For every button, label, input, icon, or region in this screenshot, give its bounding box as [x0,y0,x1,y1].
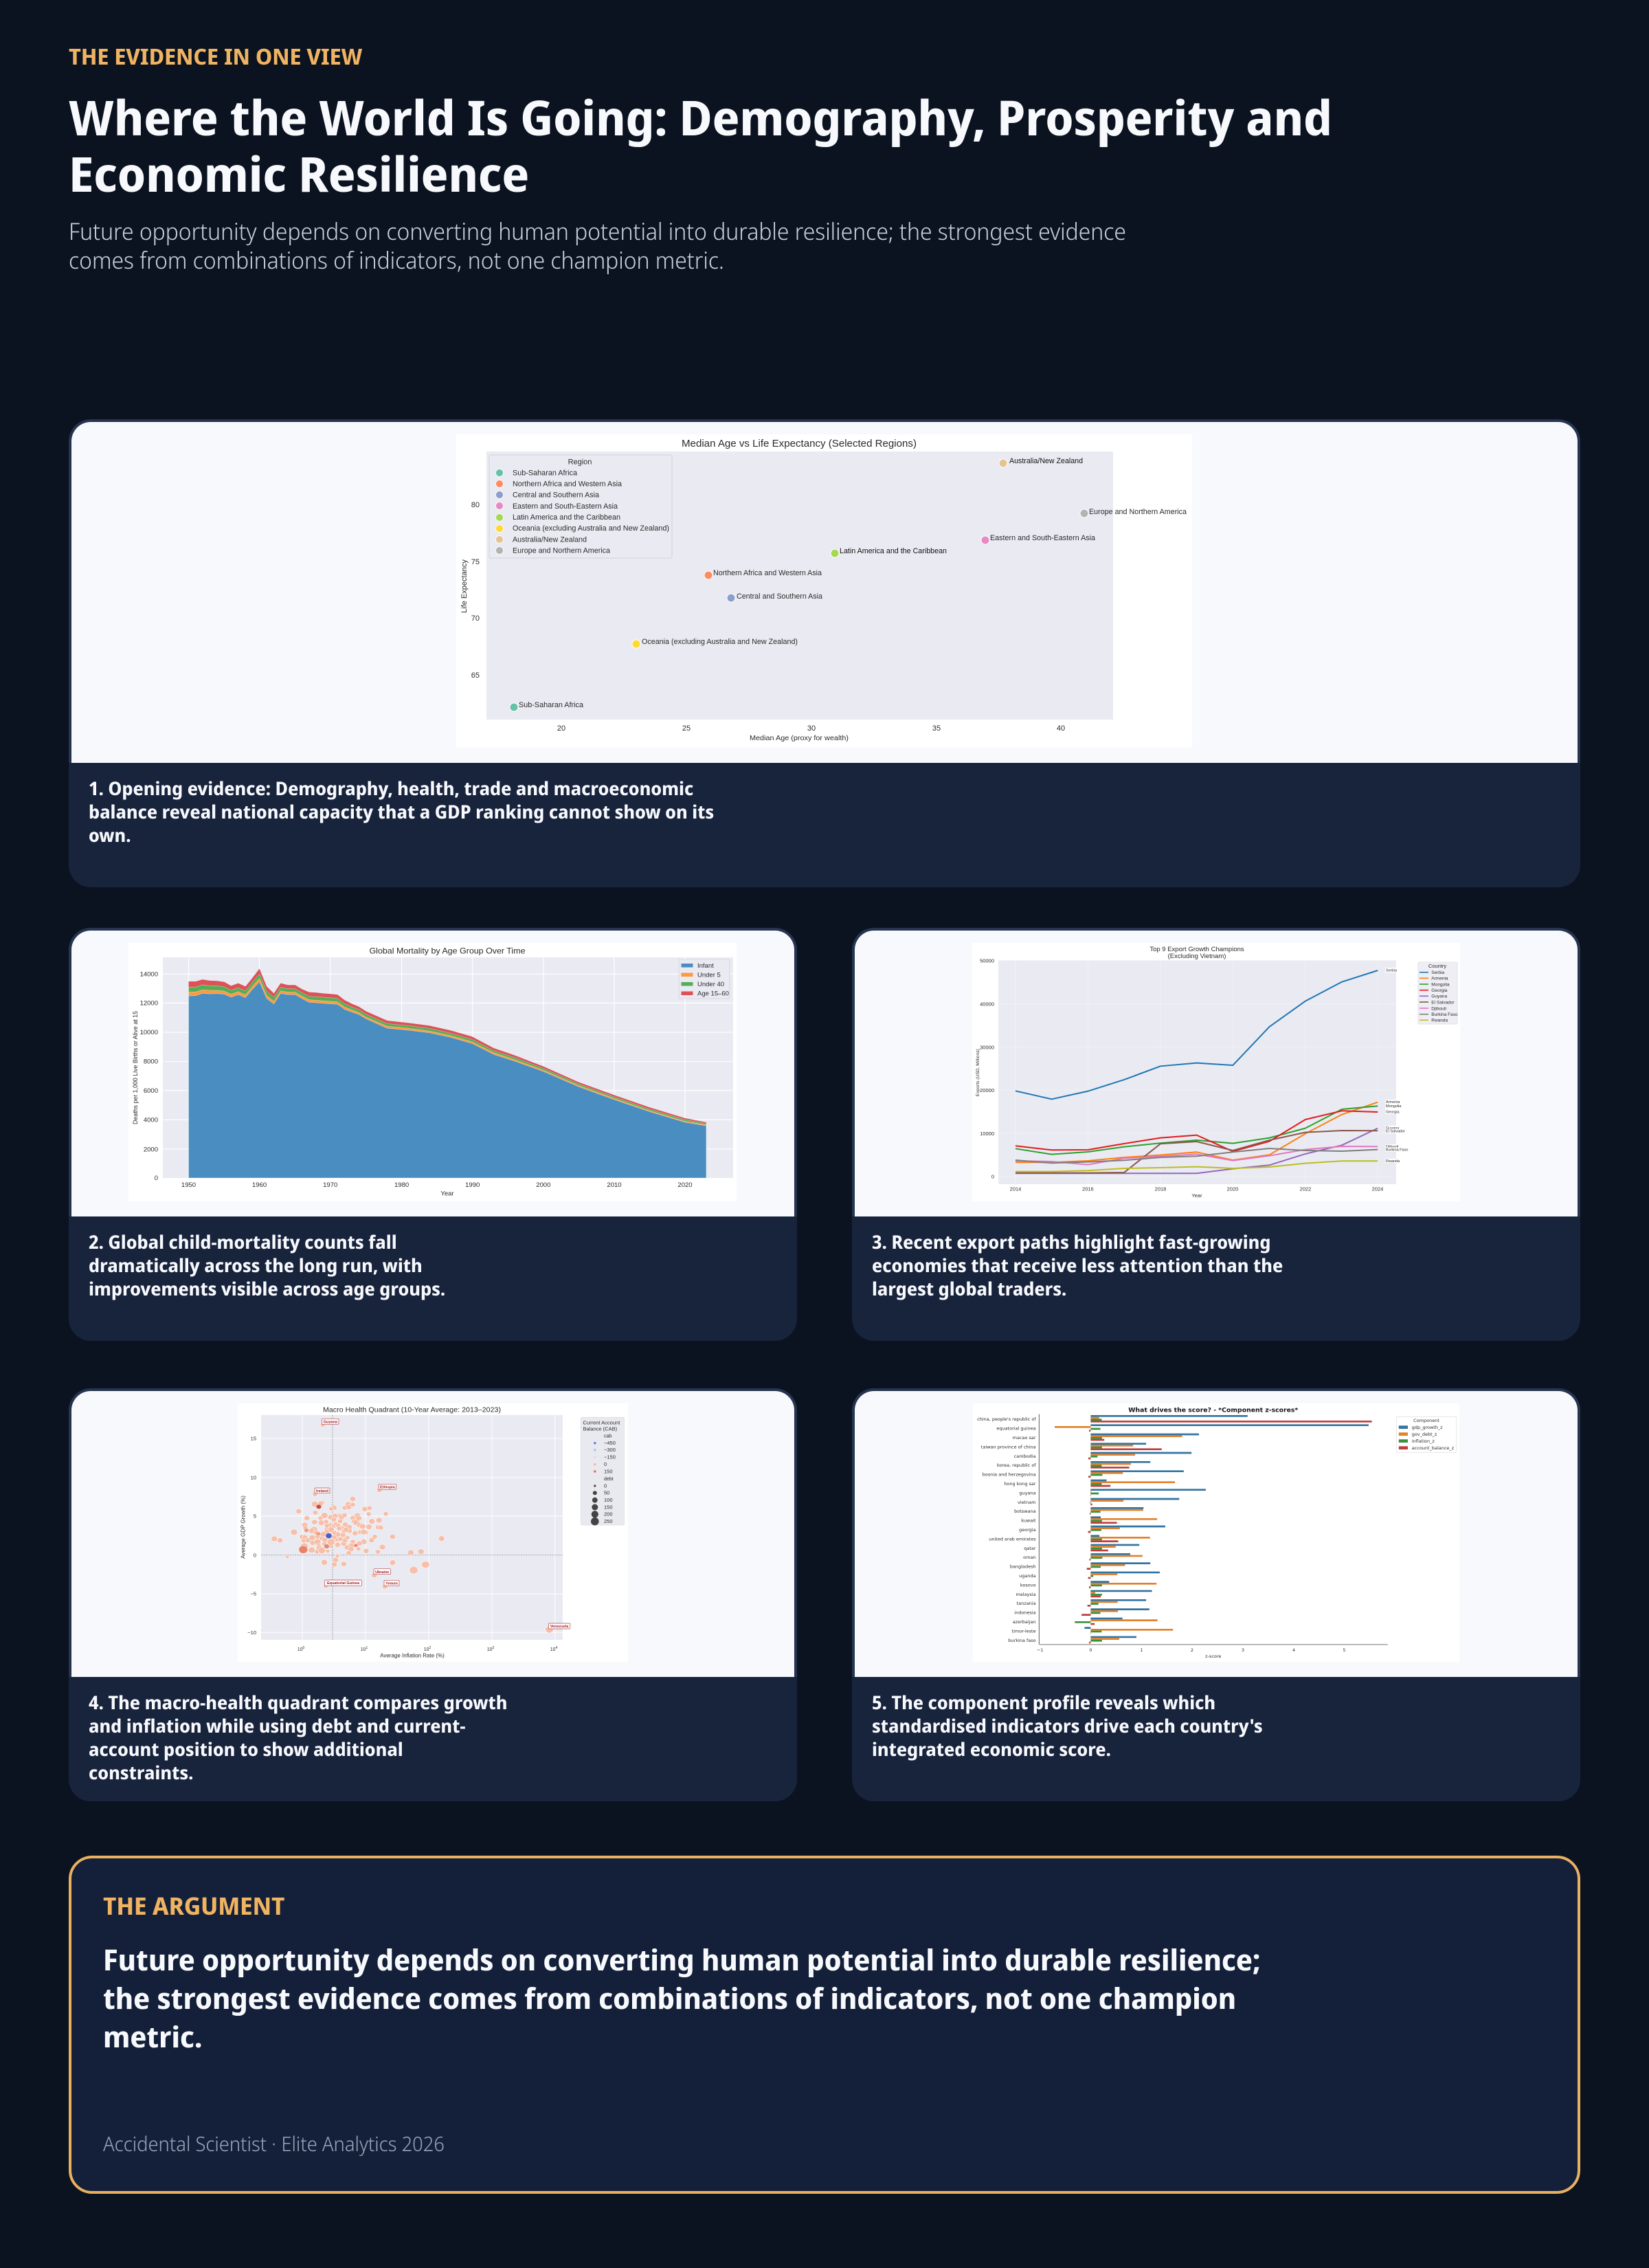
quadrant country labels: Ireland [316,1489,328,1493]
chart: component z-scores horizontal bars: china, people's republic of [977,1416,1036,1422]
end labels: Mongolia [1386,1104,1402,1109]
chart: median age vs life expectancy scatter: 65 [471,671,480,680]
legend: current account balance and debt [581,1417,624,1526]
chart: top 9 export growth champions line chart: 2022 [1300,1186,1311,1192]
subtitle [69,215,1126,276]
legend: current account balance and debt: 0 [604,1482,607,1489]
chart: macro health quadrant bubble plot: 10 [487,1647,493,1652]
chart: component z-scores horizontal bars: uganda [1019,1573,1036,1579]
quadrant country labels: Venezuela [550,1625,569,1629]
legend: country: Djibouti [1431,1006,1446,1011]
legend: current account balance and debt: 200 [604,1511,613,1517]
argument statement: the strongest evidence comes from combinations of indicators, not one champion [103,1979,1236,2018]
chart: top 9 export growth champions line chart: 10000 [980,1131,994,1137]
chart: global mortality stacked area: 4000 [144,1116,158,1124]
legend: country: Rwanda [1431,1019,1448,1023]
legend: component: gov_debt_z [1412,1432,1437,1437]
legend: age groups: Under 40 [697,981,724,988]
chart: component z-scores horizontal bars: cambodia [1014,1454,1036,1459]
caption 3: largest global traders. [872,1276,1066,1301]
chart: global mortality stacked area: 2010 [607,1181,622,1189]
subtitle: Future opportunity depends on converting human potential into durable resilience; the strongest evidence [69,215,1126,247]
chart: median age vs life expectancy scatter: Sub-Saharan Africa [519,701,584,709]
chart: global mortality stacked area: Year [440,1190,454,1197]
end labels: Djibouti [1386,1145,1398,1149]
title [69,85,1332,206]
chart: median age vs life expectancy scatter: Central and Southern Asia [737,592,823,601]
caption 4: account position to show additional [89,1736,403,1761]
legend: region [489,455,672,558]
chart: component z-scores horizontal bars: 2 [1191,1647,1193,1653]
chart: median age vs life expectancy scatter: 35 [932,724,941,733]
legend: age groups: Age 15–60 [697,990,729,998]
legend: region: Region [568,458,592,466]
legend: country: Georgia [1431,988,1448,993]
caption 5: integrated economic score. [872,1736,1111,1761]
chart: component z-scores horizontal bars: vietnam [1018,1500,1036,1505]
chart: median age vs life expectancy scatter: 20 [557,724,565,733]
caption 2: 2. Global child-mortality counts fall [89,1229,397,1254]
legend: age groups: Infant [697,962,714,970]
chart: component z-scores horizontal bars: 1 [1140,1647,1143,1653]
quadrant country labels: Ukraine [375,1570,389,1575]
chart: macro health quadrant bubble plot: 10 [550,1647,556,1652]
chart: global mortality stacked area [132,946,733,1197]
chart: component z-scores horizontal bars: equatorial guinea [996,1426,1036,1432]
chart: median age vs life expectancy scatter: Northern Africa and Western Asia [713,569,822,577]
legend: country: El Salvador [1431,1000,1455,1005]
chart: macro health quadrant bubble plot: −10 [247,1630,256,1636]
chart: component z-scores horizontal bars: bangladesh [1010,1564,1036,1570]
chart: component z-scores horizontal bars: taiwan province of china [981,1444,1036,1449]
legend: current account balance and debt: −150 [604,1454,616,1460]
caption 2: improvements visible across age groups. [89,1276,445,1301]
legend: region: Central and Southern Asia [513,491,600,499]
footer credit: Accidental Scientist · Elite Analytics 2026 [103,2131,445,2157]
quadrant country labels [315,1419,570,1629]
argument statement: metric. [103,2017,202,2056]
chart: global mortality stacked area: 2000 [536,1181,550,1189]
end labels [1385,968,1408,1164]
legend: component: Component [1413,1418,1439,1423]
legend: region: Europe and Northern America [513,547,611,555]
caption 4: and inflation while using debt and current- [89,1713,465,1738]
legend: country: Mongolia [1431,982,1450,987]
chart: median age vs life expectancy scatter: Oceania (excluding Australia and New Zealand) [642,638,798,646]
caption 2: dramatically across the long run, with [89,1252,423,1278]
argument eyebrow: THE ARGUMENT [103,1889,284,1922]
end labels: Rwanda [1386,1159,1400,1164]
image area 3 [852,928,1580,1216]
chart: top 9 export growth champions line chart: 2016 [1082,1186,1094,1192]
chart: macro health quadrant bubble plot: Average Inflation Rate (%) [380,1653,445,1659]
chart: component z-scores horizontal bars: oman [1023,1555,1036,1560]
image area 5 [852,1388,1580,1677]
caption 5: standardised indicators drive each country's [872,1713,1263,1738]
legend: country: Country [1428,963,1446,969]
chart: macro health quadrant bubble plot: 5 [254,1513,256,1520]
image area 1 [69,419,1580,763]
panel: card 4 macro health quadrant [69,1388,797,1801]
legend: region: Australia/New Zealand [513,536,587,544]
caption 3: 3. Recent export paths highlight fast-growing [872,1229,1270,1254]
chart: component z-scores horizontal bars: qatar [1024,1546,1036,1551]
chart: macro health quadrant bubble plot: Macro Health Quadrant (10-Year Average: 2013–2023) [323,1406,501,1414]
legend: component: inflation_z [1412,1438,1435,1444]
chart: top 9 export growth champions line chart: (Excluding Vietnam) [1168,953,1226,960]
legend: current account balance and debt: 0 [604,1461,607,1467]
chart: component z-scores horizontal bars: kosovo [1020,1582,1036,1588]
chart: component z-scores horizontal bars: hong kong sar [1004,1481,1036,1487]
caption 3 [872,1229,1283,1301]
chart: top 9 export growth champions line chart: 40000 [980,1001,994,1007]
chart: median age vs life expectancy scatter: Latin America and the Caribbean [840,547,947,555]
end labels: Burkina Faso [1386,1148,1408,1152]
legend: current account balance and debt: −300 [604,1447,616,1453]
image area 2 [69,928,797,1216]
chart: macro health quadrant bubble plot: −5 [250,1591,256,1597]
chart: top 9 export growth champions line chart: 2020 [1227,1186,1238,1192]
legend: current account balance and debt: debt [604,1477,614,1482]
legend: region: Northern Africa and Western Asia [513,480,622,488]
title: Where the World Is Going: Demography, Prosperity and [69,85,1332,150]
chart: macro health quadrant bubble plot: 10 [361,1647,366,1652]
caption 1: 1. Opening evidence: Demography, health, trade and macroeconomic [89,775,693,801]
end labels: Guyana [1386,1126,1400,1131]
chart: median age vs life expectancy scatter: Life Expectancy [460,559,469,613]
legend: component: gdp_growth_z [1412,1425,1443,1430]
legend: current account balance and debt: 50 [604,1490,609,1496]
end labels: Georgia [1386,1111,1400,1115]
chart: component z-scores horizontal bars: 3 [1242,1647,1244,1653]
chart: component z-scores horizontal bars: 4 [1292,1647,1295,1653]
legend: region: Sub-Saharan Africa [513,469,578,477]
chart: median age vs life expectancy scatter: 25 [682,724,691,733]
chart: global mortality stacked area: 2020 [677,1181,693,1189]
caption 4 [89,1689,507,1785]
chart: top 9 export growth champions line chart: 30000 [980,1044,994,1050]
caption 3: economies that receive less attention than the [872,1252,1283,1278]
legend: age groups [679,959,730,999]
chart: component z-scores horizontal bars: −1 [1037,1647,1044,1653]
chart: global mortality stacked area: 6000 [144,1087,158,1095]
chart: component z-scores horizontal bars: What drives the score? - *Component z-scores* [1128,1408,1299,1414]
chart: component z-scores horizontal bars: macao sar [1013,1435,1036,1441]
chart: component z-scores horizontal bars: z-score [1205,1654,1221,1659]
caption 1 [89,775,714,847]
chart: component z-scores horizontal bars: korea, republic of [997,1463,1036,1468]
chart: component z-scores horizontal bars: united arab emirates [989,1536,1036,1542]
chart: top 9 export growth champions line chart: 0 [991,1174,994,1180]
chart: median age vs life expectancy scatter: Europe and Northern America [1089,508,1187,516]
chart: median age vs life expectancy scatter: Eastern and South-Eastern Asia [990,534,1096,542]
chart: top 9 export growth champions line chart: 2014 [1010,1186,1021,1192]
panel: the argument [69,1856,1580,2194]
chart: median age vs life expectancy scatter: Median Age (proxy for wealth) [750,734,849,742]
caption 4: constraints. [89,1759,193,1785]
caption 1: balance reveal national capacity that a GDP ranking cannot show on its [89,799,714,824]
legend: region: Eastern and South-Eastern Asia [513,502,618,511]
end labels: Armenia [1386,1100,1400,1104]
chart: macro health quadrant bubble plot: 10 [298,1647,303,1652]
title: Economic Resilience [69,141,529,206]
chart: component z-scores horizontal bars: guyana [1019,1490,1036,1496]
chart: component z-scores horizontal bars [977,1408,1457,1659]
chart: global mortality stacked area: 1990 [465,1181,480,1189]
legend: current account balance and debt: 100 [604,1497,613,1503]
panel: card 1 median age vs life expectancy [69,419,1580,887]
chart: component z-scores horizontal bars: 5 [1343,1647,1346,1653]
subtitle: comes from combinations of indicators, not one champion metric. [69,244,724,276]
eyebrow: the evidence in one view: THE EVIDENCE IN ONE VIEW [69,41,362,71]
legend: country: Armenia [1431,977,1448,981]
chart: median age vs life expectancy scatter: Median Age vs Life Expectancy (Selected Regions) [682,438,917,449]
panel: card 3 export champions [852,928,1580,1341]
end labels: Serbia [1386,969,1398,973]
caption 4: 4. The macro-health quadrant compares growth [89,1689,507,1715]
legend: country: Serbia [1431,970,1444,975]
chart: global mortality stacked area: 1980 [394,1181,409,1189]
chart: component z-scores horizontal bars: botswana [1014,1509,1036,1514]
chart: component z-scores horizontal bars: indonesia [1014,1610,1036,1616]
chart: component z-scores horizontal bars: bosnia and herzegovina [983,1472,1036,1478]
chart: macro health quadrant bubble plot: 1 [366,1646,368,1650]
chart: macro health quadrant bubble plot: 15 [251,1436,256,1442]
chart: global mortality stacked area: 10000 [140,1029,158,1036]
panel: card 2 global mortality [69,928,797,1341]
legend: country: Guyana [1431,994,1447,999]
chart: global mortality stacked area: 2000 [144,1146,158,1153]
chart: global mortality stacked area: Global Mortality by Age Group Over Time [370,946,526,955]
chart: component z-scores horizontal bars: timor-leste [1012,1628,1036,1634]
legend: region: Latin America and the Caribbean [513,513,620,522]
legend: component: account_balance_z [1412,1445,1455,1451]
legend: country: Burkina Faso [1431,1012,1458,1017]
chart: top 9 export growth champions line chart: 2024 [1372,1186,1383,1192]
chart: top 9 export growth champions line chart: 20000 [980,1087,994,1093]
chart: macro health quadrant bubble plot [240,1406,625,1659]
chart: macro health quadrant bubble plot: 10 [251,1474,256,1480]
legend: current account balance and debt: 150 [604,1504,613,1510]
argument statement [103,1940,1260,2056]
chart: global mortality stacked area: 14000 [140,970,158,979]
quadrant country labels: Ethiopia [380,1485,396,1489]
image area 4 [69,1388,797,1677]
chart: global mortality stacked area: 0 [155,1175,158,1182]
caption 1: own. [89,822,131,847]
chart: median age vs life expectancy scatter: 75 [471,558,480,566]
chart: macro health quadrant bubble plot: 2 [429,1646,431,1650]
chart: top 9 export growth champions line chart: Exports (USD, Millions) [976,1049,980,1096]
chart: median age vs life expectancy scatter: 80 [471,501,480,509]
chart: median age vs life expectancy scatter: 70 [471,614,480,623]
legend: current account balance and debt: Current Account [583,1420,620,1425]
legend: current account balance and debt: 150 [604,1468,613,1474]
legend: region: Oceania (excluding Australia and New Zealand) [513,524,669,533]
caption 2 [89,1229,445,1301]
chart: global mortality stacked area: 8000 [144,1058,158,1065]
chart: global mortality stacked area: 1960 [252,1181,267,1189]
quadrant country labels: Equatorial Guinea [327,1581,360,1586]
caption 5 [872,1689,1263,1761]
chart: median age vs life expectancy scatter: Australia/New Zealand [1009,457,1083,465]
chart: component z-scores horizontal bars: kuwait [1021,1518,1036,1524]
legend: component [1396,1416,1457,1452]
chart: top 9 export growth champions line chart: Year [1191,1192,1202,1199]
chart: component z-scores horizontal bars: azerbaijan [1013,1619,1036,1625]
chart: median age vs life expectancy scatter: 40 [1057,724,1065,733]
chart: macro health quadrant bubble plot: Average GDP Growth (%) [240,1496,246,1559]
quadrant country labels: Yemen [385,1581,399,1586]
chart: median age vs life expectancy scatter [460,438,1187,742]
chart: top 9 export growth champions line chart [976,946,1458,1199]
chart: top 9 export growth champions line chart: 2018 [1155,1186,1166,1192]
legend: age groups: Under 5 [697,972,721,979]
caption 5: 5. The component profile reveals which [872,1689,1215,1715]
chart: macro health quadrant bubble plot: 4 [556,1646,558,1650]
legend: current account balance and debt: −450 [604,1440,616,1446]
chart: top 9 export growth champions line chart: Top 9 Export Growth Champions [1149,946,1244,953]
chart: macro health quadrant bubble plot: 10 [424,1647,429,1652]
chart: macro health quadrant bubble plot: 0 [303,1646,305,1650]
legend: current account balance and debt: 250 [604,1518,613,1524]
chart: global mortality stacked area: Deaths per 1,000 Live Births or Alive at 15 [132,1011,139,1124]
chart: component z-scores horizontal bars: malaysia [1016,1592,1036,1597]
chart: macro health quadrant bubble plot: 3 [493,1646,495,1650]
chart: global mortality stacked area: 12000 [140,999,158,1008]
argument statement: Future opportunity depends on converting human potential into durable resilience; [103,1940,1260,1979]
legend: country [1418,962,1458,1024]
legend: current account balance and debt: cab [604,1434,612,1439]
chart: component z-scores horizontal bars: 0 [1089,1647,1092,1653]
chart: component z-scores horizontal bars: burkina faso [1008,1638,1036,1643]
end labels: El Salvador [1386,1129,1405,1133]
chart: global mortality stacked area: 1950 [181,1181,196,1189]
panel: card 5 component z-scores [852,1388,1580,1801]
chart: median age vs life expectancy scatter: 30 [807,724,816,733]
quadrant country labels: Guyana [324,1420,338,1424]
chart: macro health quadrant bubble plot: 0 [254,1552,256,1558]
chart: top 9 export growth champions line chart: 50000 [980,958,994,964]
chart: component z-scores horizontal bars: tanzania [1017,1601,1036,1606]
chart: global mortality stacked area: 1970 [323,1181,337,1189]
chart: component z-scores horizontal bars: georgia [1019,1527,1036,1533]
legend: current account balance and debt: Balance (CAB) [583,1425,618,1432]
